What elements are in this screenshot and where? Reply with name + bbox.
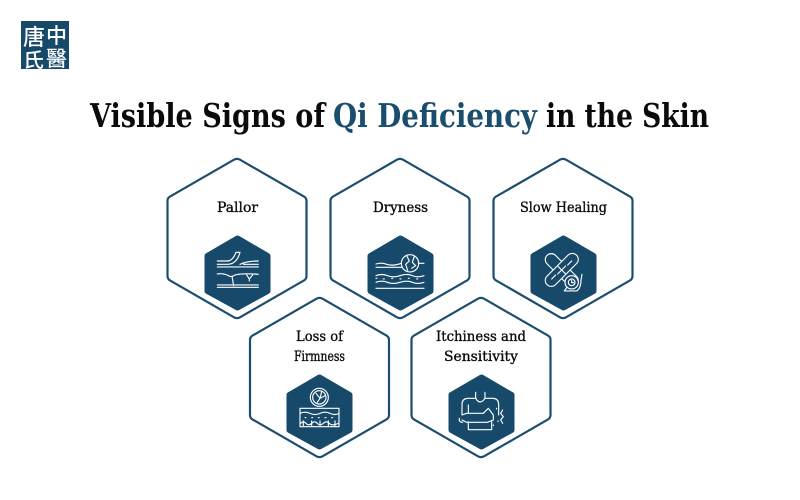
logo: 氏	[23, 49, 44, 72]
label: itchiness and sensitivity	[436, 329, 526, 365]
logo	[21, 21, 69, 72]
icon: dry skin with crack	[370, 238, 430, 308]
label: dryness: Dryness	[373, 200, 428, 216]
panel: slow healing	[494, 159, 632, 318]
logo: 中	[46, 25, 67, 48]
label: itchiness and sensitivity: Itchiness and	[436, 329, 526, 345]
panel: loss of firmness	[250, 298, 389, 457]
panel: dryness	[330, 159, 470, 318]
icon: pallor skin layers	[208, 238, 268, 308]
icon: skin section with magnifier	[290, 378, 350, 446]
icon: bandage and snail	[534, 238, 594, 308]
label: itchiness and sensitivity: Sensitivity	[444, 349, 518, 365]
panel: itchiness and sensitivity	[412, 298, 550, 457]
logo: 唐	[23, 25, 45, 50]
label: loss of firmness	[294, 329, 345, 365]
logo: 醫	[46, 48, 67, 71]
title: Qi Deficiency	[333, 96, 538, 135]
icon: scratching torso	[452, 378, 512, 446]
label: loss of firmness: Loss of	[296, 329, 345, 345]
panel: pallor	[168, 159, 306, 318]
title: Visible Signs of	[89, 96, 326, 135]
title	[89, 96, 709, 135]
title: in the Skin	[546, 96, 709, 135]
label: loss of firmness: Firmness	[294, 349, 345, 365]
label: pallor: Pallor	[217, 200, 258, 216]
label: slow healing: Slow Healing	[520, 200, 607, 216]
